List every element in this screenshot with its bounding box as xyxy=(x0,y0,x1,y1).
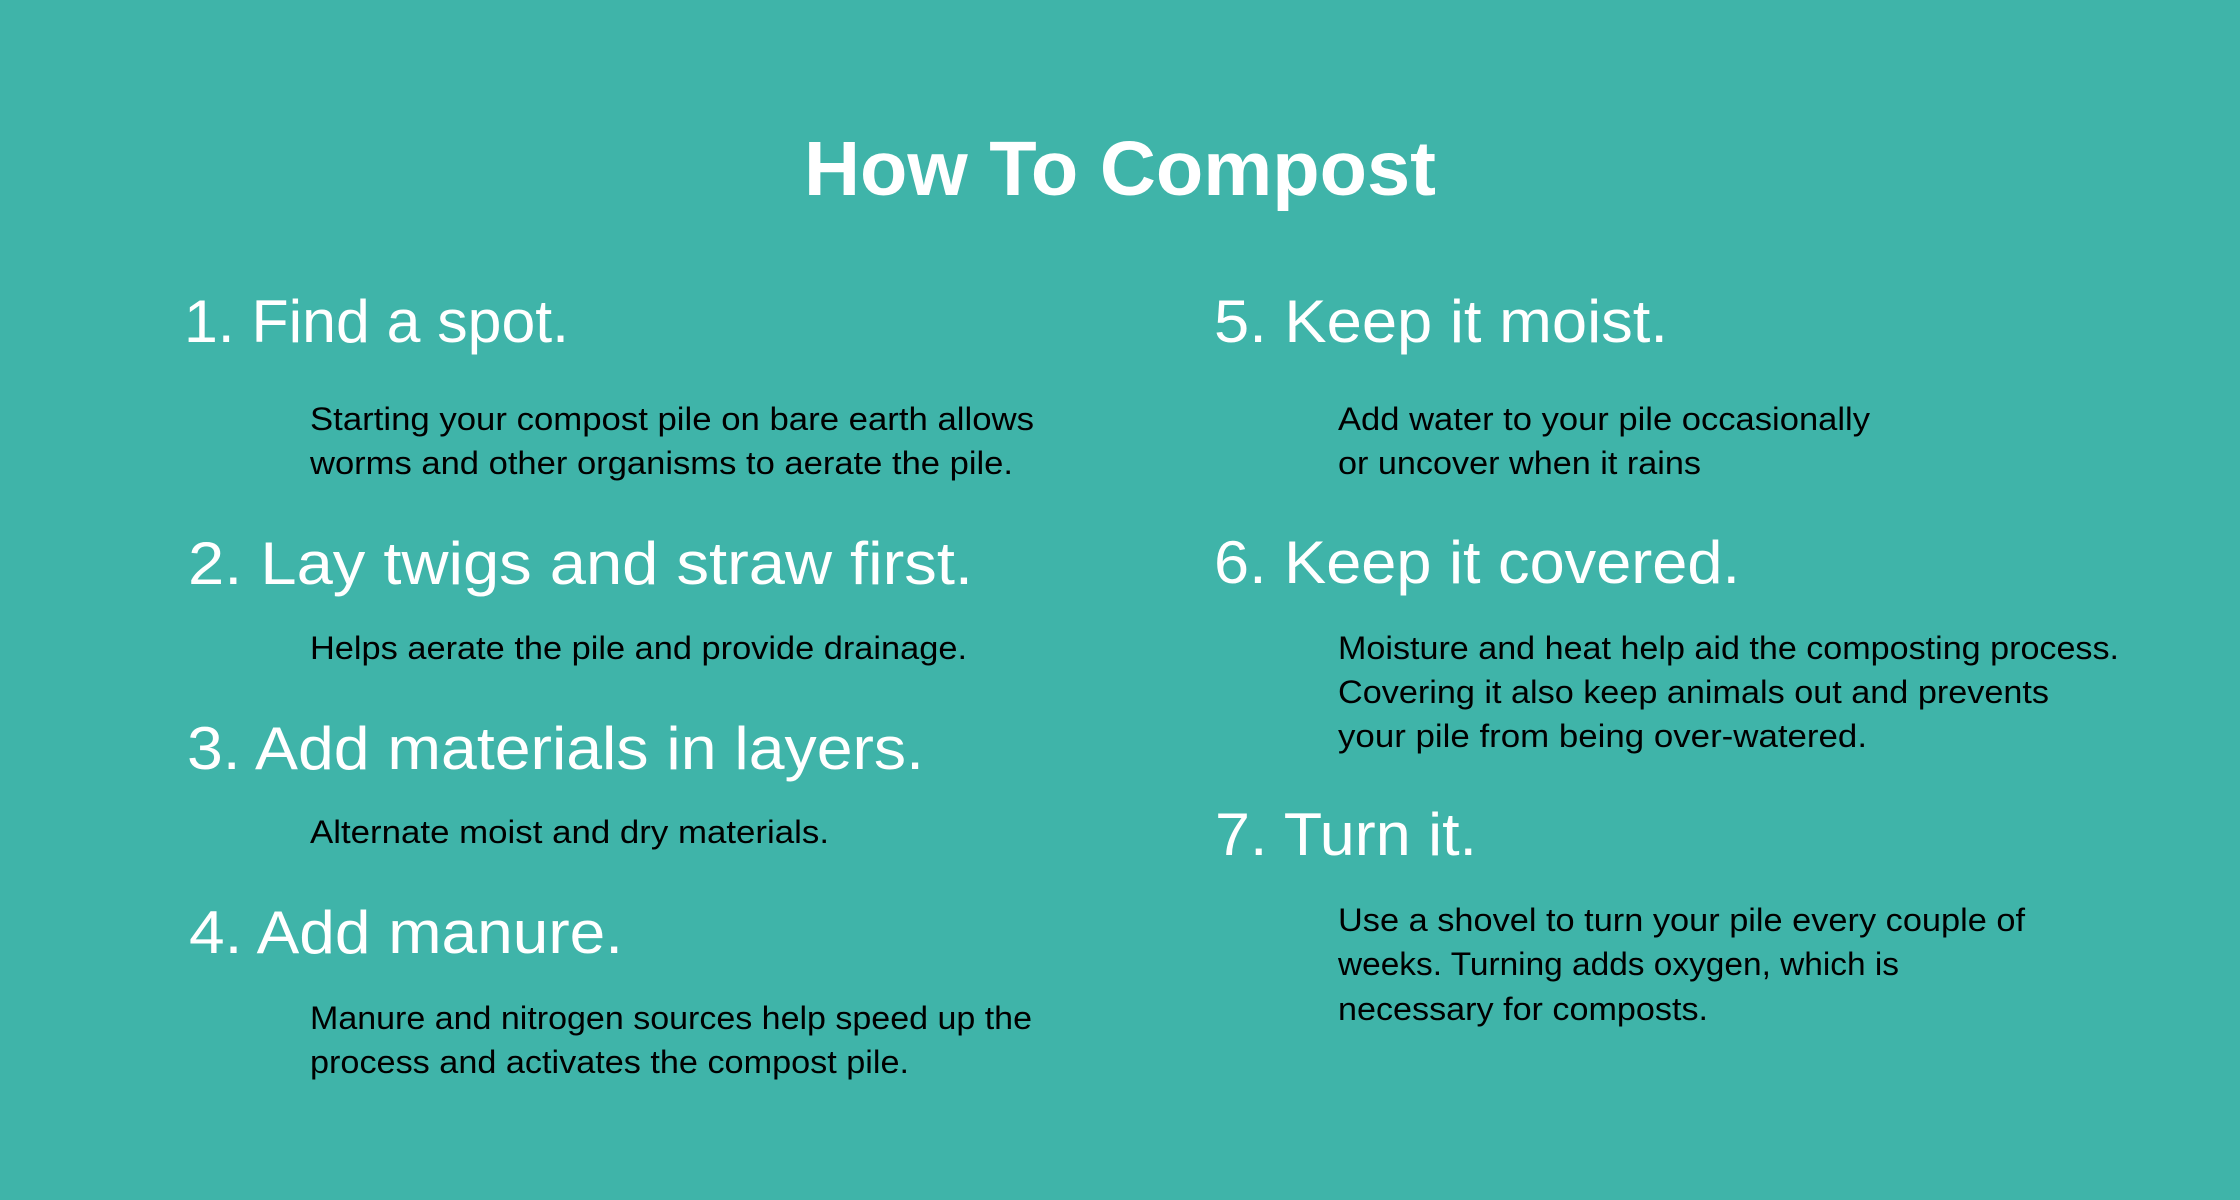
step 6 heading: 6. Keep it covered. xyxy=(1214,529,1740,596)
step 3 heading: 3. Add materials in layers. xyxy=(187,715,924,782)
step 4 description xyxy=(310,1000,1032,1080)
step 1 description xyxy=(309,401,1034,481)
step 4 xyxy=(189,899,1032,1080)
step 7 xyxy=(1215,801,2025,1027)
step 5 description: or uncover when it rains xyxy=(1338,445,1701,481)
left column: steps 1 to 4 xyxy=(184,288,1034,1080)
step 5 heading: 5. Keep it moist. xyxy=(1214,288,1668,355)
step 6 description xyxy=(1338,630,2119,754)
step 6 xyxy=(1214,529,2119,754)
right column: steps 5 to 7 xyxy=(1214,288,2119,1027)
step 1 xyxy=(184,288,1034,481)
step 2 heading: 2. Lay twigs and straw first. xyxy=(188,530,973,597)
step 7 description: necessary for composts. xyxy=(1338,991,1708,1027)
title: How To Compost xyxy=(804,126,1436,212)
step 6 description: Covering it also keep animals out and prevents xyxy=(1338,674,2049,710)
step 4 description: process and activates the compost pile. xyxy=(310,1044,909,1080)
step 2 description: Helps aerate the pile and provide drainage. xyxy=(310,630,967,666)
step 7 description xyxy=(1337,902,2025,1027)
step 3 description: Alternate moist and dry materials. xyxy=(310,814,829,850)
step 7 heading: 7. Turn it. xyxy=(1215,801,1477,868)
step 6 description: your pile from being over-watered. xyxy=(1338,718,1867,754)
step 6 description: Moisture and heat help aid the composting process. xyxy=(1338,630,2119,666)
step 1 description: Starting your compost pile on bare earth allows xyxy=(310,401,1034,437)
step 1 heading: 1. Find a spot. xyxy=(184,288,569,355)
step 1 description: worms and other organisms to aerate the pile. xyxy=(309,445,1013,481)
step 5 description xyxy=(1338,401,1870,481)
step 5 description: Add water to your pile occasionally xyxy=(1338,401,1870,437)
step 7 description: weeks. Turning adds oxygen, which is xyxy=(1337,946,1899,982)
step 3 xyxy=(187,715,924,850)
step 4 heading: 4. Add manure. xyxy=(189,899,623,966)
step 2 xyxy=(188,530,973,666)
step 7 description: Use a shovel to turn your pile every couple of xyxy=(1338,902,2025,938)
step 4 description: Manure and nitrogen sources help speed up the xyxy=(310,1000,1032,1036)
step 5 xyxy=(1214,288,1870,481)
